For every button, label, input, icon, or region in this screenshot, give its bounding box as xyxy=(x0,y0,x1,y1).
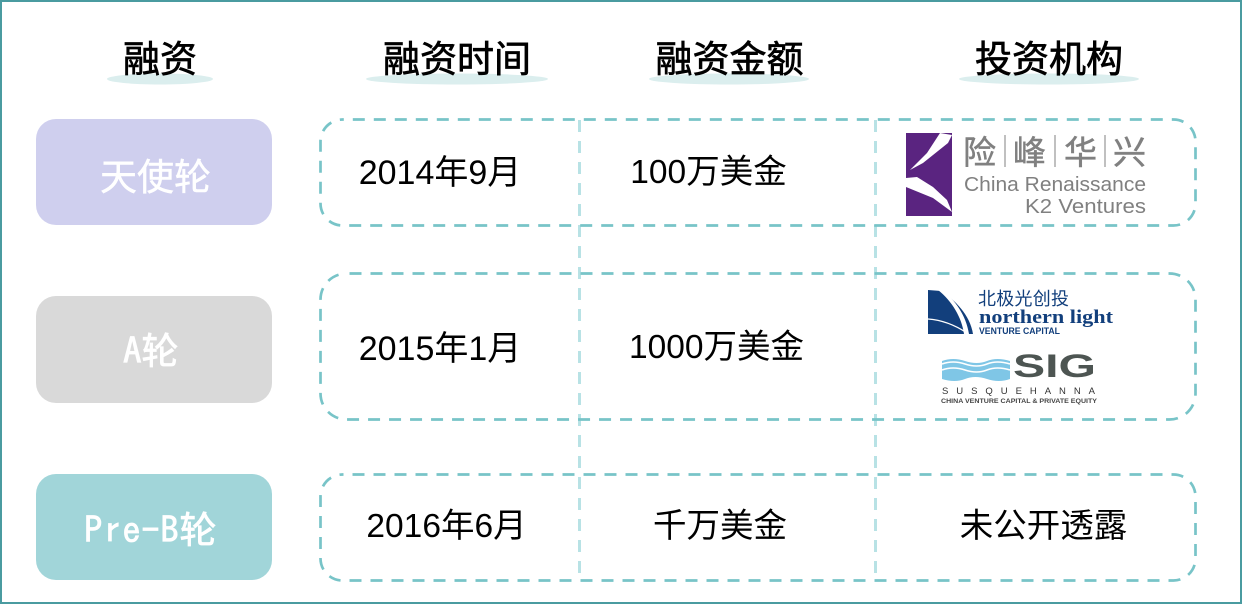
logo: northern light venture capital: northern light xyxy=(979,307,1114,328)
row 3 text xyxy=(366,508,1127,545)
round label: A轮: A轮 xyxy=(123,331,178,369)
logo: northern light venture capital: 北极光创投 xyxy=(978,289,1069,309)
dashed column dividers xyxy=(580,120,876,581)
logo: China Renaissance K2 Ventures: 华 xyxy=(1064,134,1097,171)
row 2 text: 1000万美金 xyxy=(629,329,804,366)
dashed row frames xyxy=(320,120,1196,580)
round label: A轮 xyxy=(36,296,272,403)
row 1 text: 100万美金 xyxy=(630,154,787,191)
row 3 text: 未公开透露 xyxy=(960,508,1127,545)
column headers: 投资机构 xyxy=(975,39,1123,80)
logo: China Renaissance K2 Ventures: China Renaissance xyxy=(964,173,1146,196)
row 2 text: 2015年1月 xyxy=(359,330,521,368)
logo: China Renaissance K2 Ventures: K2 Ventures xyxy=(1025,195,1146,218)
logo: SIG Susquehanna: CHINA VENTURE CAPITAL & PRIVATE EQUITY xyxy=(941,398,1098,405)
logo: China Renaissance K2 Ventures xyxy=(906,133,1146,218)
logo: China Renaissance K2 Ventures: 险 xyxy=(963,134,996,171)
column headers xyxy=(107,39,1139,84)
logo: SIG Susquehanna xyxy=(941,348,1098,405)
row 3 text: 2016年6月 xyxy=(366,508,527,545)
round label: 天使轮 xyxy=(36,119,272,225)
logo: SIG Susquehanna: SUSQUEHANNA xyxy=(942,386,1096,397)
logo: northern light venture capital: VENTURE CAPITAL xyxy=(979,326,1060,337)
row 2 text xyxy=(359,329,804,368)
column headers: 融资金额 xyxy=(656,39,804,80)
logo: northern light venture capital xyxy=(928,289,1114,337)
round label: 天使轮: 天使轮 xyxy=(100,157,211,198)
round label: Pre-B轮: Pre-B轮 xyxy=(84,510,217,548)
logo: China Renaissance K2 Ventures: 兴 xyxy=(1113,134,1146,171)
round label: Pre-B轮 xyxy=(36,474,272,580)
column headers: 融资时间 xyxy=(383,39,531,80)
row 1 text xyxy=(359,154,787,192)
logo: China Renaissance K2 Ventures: 峰 xyxy=(1013,134,1046,171)
logo: SIG Susquehanna: SIG xyxy=(1013,348,1096,384)
row 3 text: 千万美金 xyxy=(653,508,787,545)
column headers: 融资 xyxy=(123,39,197,80)
row 1 text: 2014年9月 xyxy=(359,154,521,192)
